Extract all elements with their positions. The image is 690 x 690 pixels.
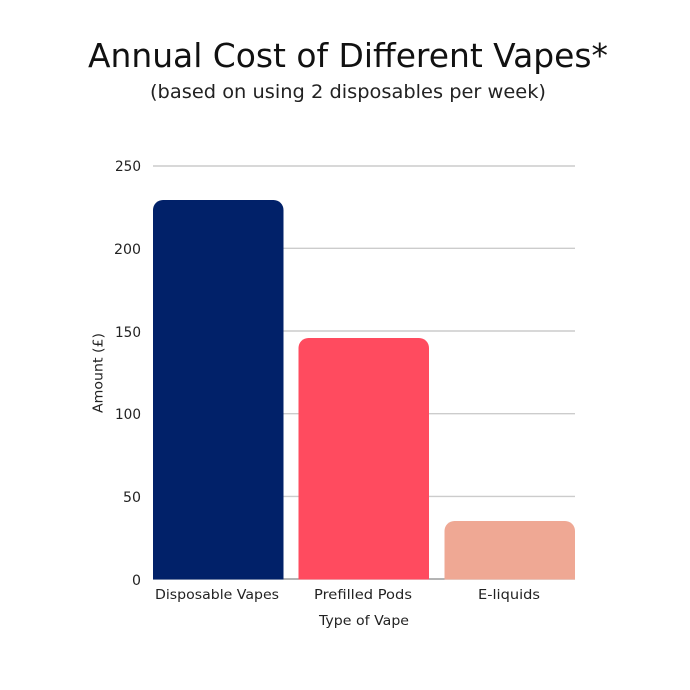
y axis labels: 0 [132,573,141,589]
bar: Prefilled Pods [298,338,429,580]
y axis labels: 150 [115,325,141,341]
subtitle: (based on using 2 disposables per week) [150,81,546,103]
y axis title: Amount (£) [90,333,106,413]
y axis labels [114,159,141,589]
title: Annual Cost of Different Vapes* [88,36,608,75]
y axis labels: 250 [115,159,141,175]
y axis labels: 200 [114,242,141,258]
bar: Disposable Vapes [153,200,284,580]
x axis labels [155,587,540,603]
x axis labels: E-liquids [478,587,540,603]
bar: E-liquids [444,521,575,580]
y axis labels: 50 [123,490,141,506]
x axis title: Type of Vape [318,613,409,629]
x axis labels: Disposable Vapes [155,587,279,603]
y axis labels: 100 [115,407,141,423]
x axis labels: Prefilled Pods [314,587,412,603]
